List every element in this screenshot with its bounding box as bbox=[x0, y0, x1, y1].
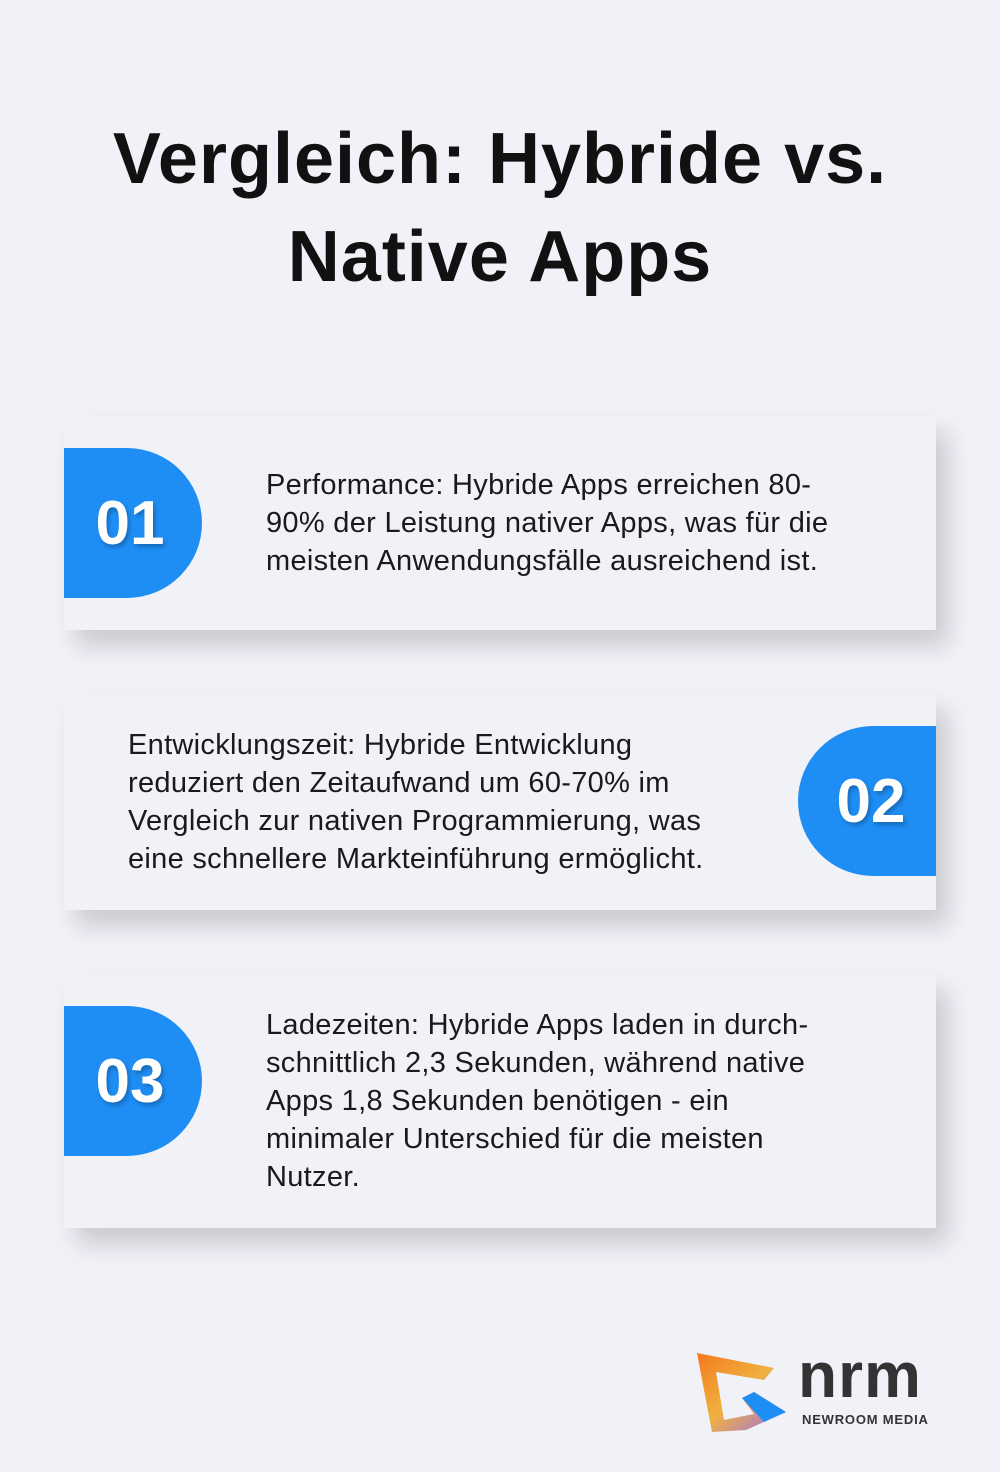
panel: development time bbox=[64, 694, 936, 910]
logo: newroom media: NEWROOM MEDIA bbox=[802, 1412, 929, 1427]
text: load times: minimaler Unterschied für die meisten bbox=[266, 1123, 764, 1155]
title: Vergleich: Hybride vs. bbox=[113, 119, 887, 199]
text: load times: Nutzer. bbox=[266, 1161, 360, 1193]
icon: logo mark bbox=[697, 1353, 786, 1432]
badge 03 bbox=[64, 1006, 202, 1156]
panel: performance bbox=[64, 416, 936, 630]
badge 03: 03 bbox=[96, 1046, 164, 1116]
text: development time: reduziert den Zeitaufwand um 60-70% im bbox=[128, 767, 670, 799]
text: performance: Performance: Hybride Apps erreichen 80- bbox=[266, 469, 811, 501]
text: performance: 90% der Leistung nativer Apps, was für die bbox=[266, 507, 828, 539]
logo: newroom media bbox=[697, 1339, 929, 1432]
text: load times: schnittlich 2,3 Sekunden, während native bbox=[266, 1047, 805, 1079]
badge 02: 02 bbox=[837, 766, 905, 836]
text: development time: Vergleich zur nativen Programmierung, was bbox=[128, 805, 701, 837]
panel: load times bbox=[64, 974, 936, 1228]
text: development time: eine schnellere Markteinführung ermöglicht. bbox=[128, 843, 703, 875]
badge 01: 01 bbox=[96, 488, 164, 558]
text: load times: Apps 1,8 Sekunden benötigen - ein bbox=[266, 1085, 729, 1117]
text: performance: meisten Anwendungsfälle ausreichend ist. bbox=[266, 545, 818, 577]
text: development time bbox=[128, 729, 703, 875]
badge 02 bbox=[798, 726, 936, 876]
title bbox=[113, 119, 887, 297]
logo text: nrm bbox=[798, 1339, 922, 1411]
text: load times bbox=[266, 1009, 808, 1193]
text: development time: Entwicklungszeit: Hybride Entwicklung bbox=[128, 729, 632, 761]
text: performance bbox=[266, 469, 828, 577]
text: load times: Ladezeiten: Hybride Apps laden in durch- bbox=[266, 1009, 808, 1041]
badge 01 bbox=[64, 448, 202, 598]
title: Native Apps bbox=[288, 217, 712, 297]
